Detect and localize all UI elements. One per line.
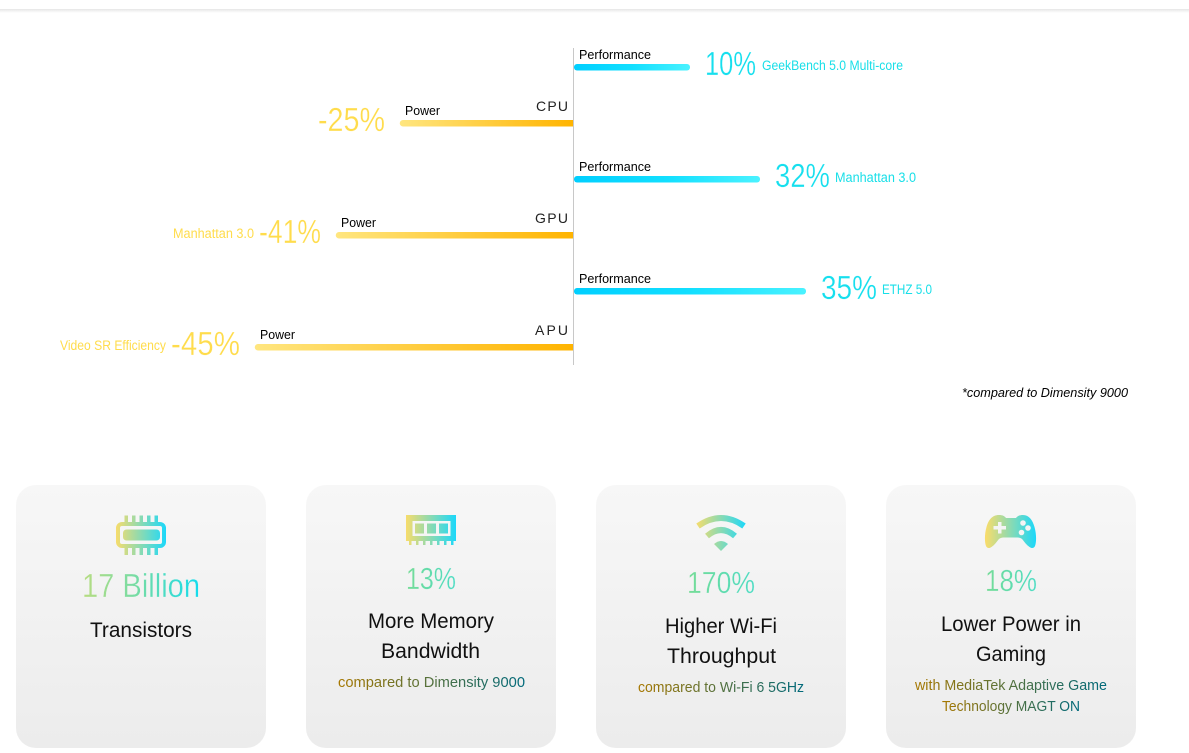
footnote: *compared to Dimensity 9000 — [962, 385, 1129, 400]
panel: memory bandwidth — [306, 485, 556, 748]
icon: memory module — [406, 515, 456, 545]
panel: wi-fi throughput — [596, 485, 846, 748]
panel: transistors — [16, 485, 266, 748]
note: MediaTek Adaptive Game Technology — [914, 677, 1107, 715]
GPU performance row: Manhattan 3.0 — [835, 170, 916, 185]
APU power row: Power — [260, 328, 295, 342]
chart: performance and power comparison — [60, 45, 932, 365]
GPU performance row: Performance — [579, 160, 651, 174]
CPU power row: -25% — [318, 101, 385, 138]
CPU power row: Power — [405, 104, 440, 118]
APU performance row: ETHZ 5.0 — [882, 282, 932, 297]
CPU power row: CPU — [536, 98, 568, 114]
icon: chip — [118, 516, 164, 555]
label: transistors: Transistors — [90, 619, 192, 642]
APU power row: -45% — [171, 325, 240, 362]
GPU performance row: 32% — [775, 157, 830, 194]
GPU power row — [173, 210, 573, 250]
panel: gaming power — [886, 485, 1136, 748]
APU performance row: 35% — [821, 269, 877, 306]
CPU performance row — [574, 45, 903, 82]
CPU performance row: Performance — [579, 48, 651, 62]
note: MediaTek Adaptive Game Technology: Technology MAGT ON — [942, 698, 1080, 715]
stat: 13%: 13% — [406, 561, 456, 596]
label: higher wi-fi throughput: Higher Wi-Fi — [665, 615, 777, 638]
stat: 17 billion: 17 Billion — [82, 567, 200, 604]
CPU performance row: GeekBench 5.0 Multi-core — [762, 58, 903, 73]
GPU power row: Manhattan 3.0 — [173, 226, 254, 241]
label: higher wi-fi throughput — [665, 615, 777, 668]
label: more memory bandwidth: Bandwidth — [381, 640, 480, 663]
GPU power row: GPU — [535, 210, 568, 226]
note: compared to Dimensity 9000: compared to Dimensity 9000 — [338, 674, 525, 691]
APU performance row — [574, 269, 932, 306]
label: higher wi-fi throughput: Throughput — [667, 645, 776, 668]
label: more memory bandwidth — [368, 610, 494, 663]
icon: game controller — [985, 515, 1036, 548]
GPU performance row — [574, 157, 916, 194]
APU power row — [60, 322, 573, 362]
note: compared to wi-fi 6 5GHz: compared to Wi-Fi 6 5GHz — [638, 679, 804, 696]
label: lower power in gaming — [941, 613, 1081, 666]
stat: 18%: 18% — [985, 563, 1037, 598]
label: lower power in gaming: Lower Power in — [941, 613, 1081, 636]
APU power row: Video SR Efficiency — [60, 338, 166, 353]
label: lower power in gaming: Gaming — [976, 643, 1046, 666]
APU performance row: Performance — [579, 272, 651, 286]
CPU performance row: 10% — [705, 45, 756, 82]
top header shadow — [0, 9, 1189, 13]
icon: wi-fi — [698, 518, 744, 551]
stat: 170%: 170% — [687, 565, 755, 600]
label: more memory bandwidth: More Memory — [368, 610, 494, 633]
APU power row: APU — [535, 322, 568, 338]
CPU power row — [318, 98, 573, 138]
GPU power row: Power — [341, 216, 376, 230]
GPU power row: -41% — [259, 213, 321, 250]
note: MediaTek Adaptive Game Technology: with MediaTek Adaptive Game — [914, 677, 1107, 694]
